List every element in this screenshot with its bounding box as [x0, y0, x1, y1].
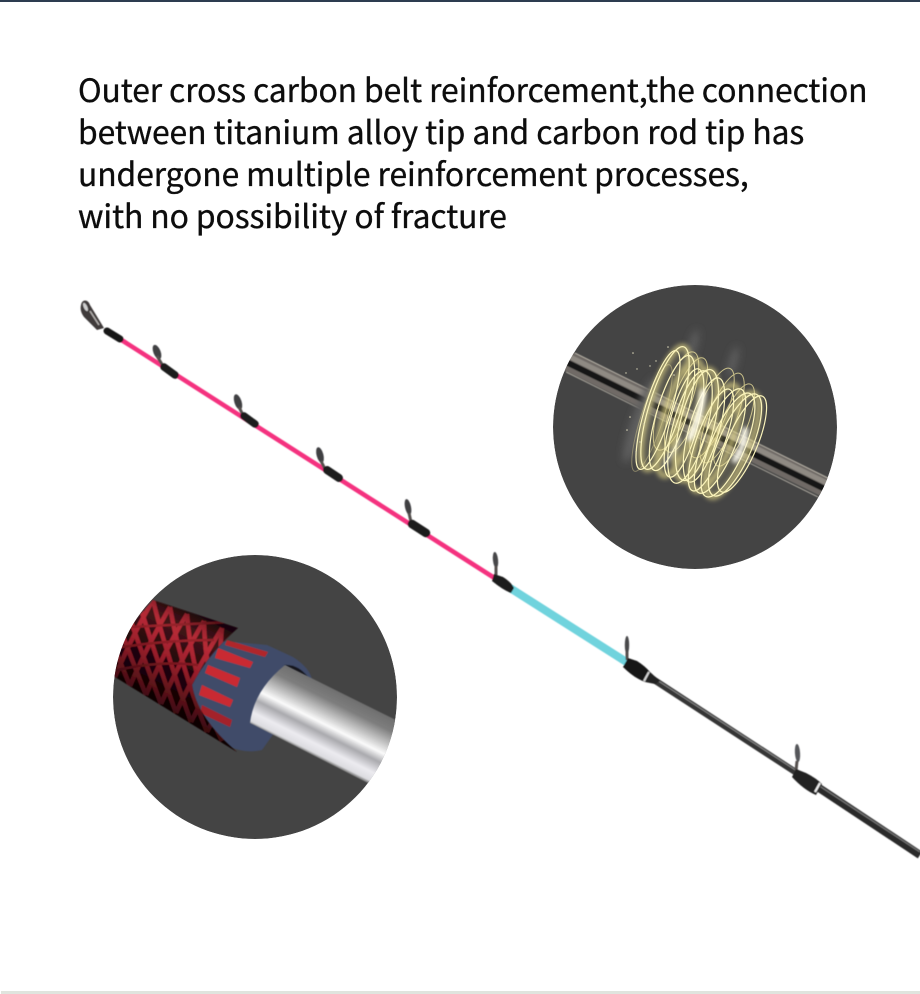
coil glow layer: [631, 342, 770, 503]
rod blank: pink tip section: [120, 339, 496, 579]
front coil strokes: [635, 346, 768, 498]
back coil strokes: [631, 351, 755, 472]
translucent coil bodies: [642, 351, 756, 494]
glowing coils: [624, 342, 776, 503]
guide 8: [792, 744, 822, 795]
fishing rod: [81, 300, 920, 855]
detail circle: carbon belt wrap: [553, 285, 837, 569]
guide 4: [315, 446, 339, 478]
guide 3: [232, 393, 255, 424]
heading text: Outer cross carbon belt reinforcement,the connection: [78, 66, 868, 112]
collar red stripes: [199, 640, 268, 727]
heading text: with no possibility of fracture: [78, 192, 507, 238]
guide: tip top: [81, 300, 120, 339]
guide 5: [403, 499, 426, 533]
circle background: [113, 555, 397, 839]
red woven carbon belt: [114, 600, 238, 752]
silver titanium tube: [250, 664, 396, 784]
detail circle: reinforced titanium joint: [85, 555, 400, 839]
rod blank: black butt section: [645, 673, 920, 855]
blue collar: [190, 640, 312, 751]
circle background: [553, 285, 837, 569]
guide 2: [151, 344, 175, 375]
heading text: undergone multiple reinforcement processes,: [78, 150, 749, 196]
guide 7: [623, 636, 660, 684]
rod blank: cyan section: [510, 588, 628, 663]
heading text: between titanium alloy tip and carbon rod tip has: [78, 108, 804, 154]
heading text: [78, 66, 868, 238]
belt base: [116, 600, 238, 750]
sparkle particles: [625, 346, 675, 453]
bottom edge bar: [1, 991, 920, 994]
inner rim shadow: [284, 665, 308, 677]
rod inside circle: [560, 352, 835, 497]
coil highlights: [664, 392, 745, 465]
belt lattice: [114, 600, 236, 752]
belt shading: [114, 600, 238, 752]
top edge bar: [0, 0, 920, 2]
soft motion shadows: [617, 329, 741, 465]
guide 6: [492, 552, 514, 593]
